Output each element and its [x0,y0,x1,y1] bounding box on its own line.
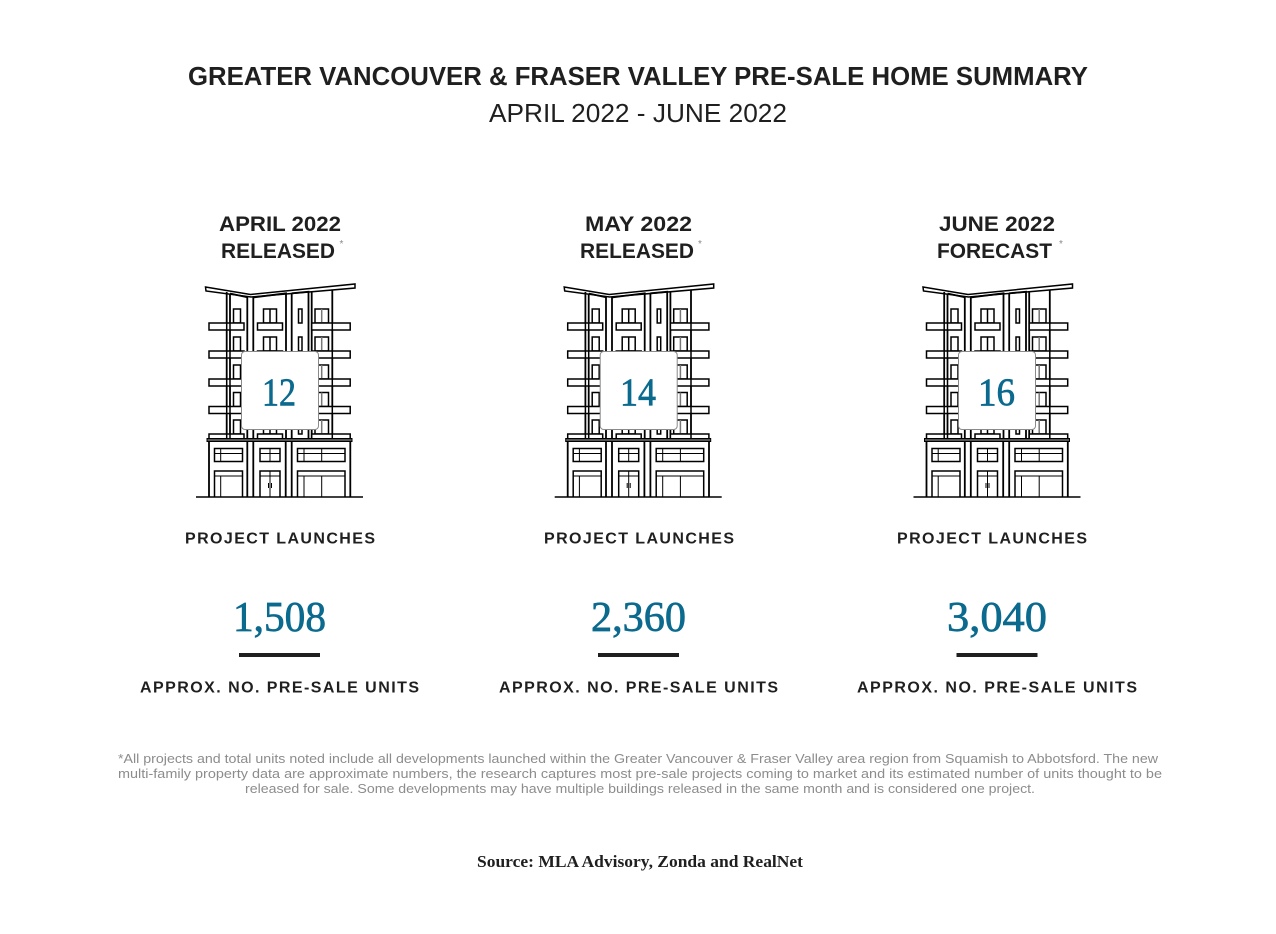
heading: May 2022 released: MAY 2022 [585,213,692,236]
number: 2,360 units: 2,360 [591,595,686,641]
label: approx. no. pre-sale units: APPROX. NO. PRE-SALE UNITS [857,680,1137,696]
title: GREATER VANCOUVER & FRASER VALLEY PRE-SALE HOME SUMMARY [188,63,1088,91]
heading: April 2022 released [219,213,344,263]
divider bar [239,653,320,657]
heading: May 2022 released: RELEASED [580,240,694,263]
icon: apartment building [196,284,363,497]
card: 16 project launches [958,352,1036,430]
divider bar [956,653,1038,657]
subtitle: APRIL 2022 - JUNE 2022 [489,100,787,128]
heading: June 2022 forecast: * [1059,239,1063,250]
divider bar [598,653,679,657]
heading: May 2022 released: * [698,239,702,250]
heading: June 2022 forecast [937,213,1063,263]
heading: April 2022 released: RELEASED [221,240,335,263]
footnote: multi-family property data are approximate numbers, the research captures most pre-sale projects coming to market and its estimated number of units thought to be [118,766,1162,781]
card: 14 project launches: 14 [620,371,656,414]
heading: June 2022 forecast: FORECAST [937,240,1052,263]
panel: May 2022 [499,213,778,696]
number: 3,040 units: 3,040 [947,595,1047,641]
heading: April 2022 released: APRIL 2022 [219,213,341,236]
footnote: *All projects and total units noted include all developments launched within the Greater Vancouver & Fraser Valley area region from Squamish to Abbotsford. The new [118,751,1159,766]
icon: apartment building [914,284,1080,497]
card: 12 project launches: 12 [262,371,296,414]
heading: May 2022 released [580,213,702,263]
heading: June 2022 forecast: JUNE 2022 [939,213,1055,236]
label: approx. no. pre-sale units: APPROX. NO. PRE-SALE UNITS [140,680,419,696]
label: project launches: PROJECT LAUNCHES [897,530,1087,548]
panel: April 2022 [140,213,419,696]
card: 16 project launches: 16 [978,371,1015,414]
label: approx. no. pre-sale units: APPROX. NO. PRE-SALE UNITS [499,680,778,696]
card: 14 project launches [600,352,677,430]
card: 12 project launches [242,352,318,430]
label: project launches: PROJECT LAUNCHES [185,530,375,548]
label: project launches: PROJECT LAUNCHES [544,530,734,548]
footnote: released for sale. Some developments may have multiple buildings released in the same month and is considered one project. [245,781,1035,796]
icon: apartment building [555,284,722,497]
footnote [118,751,1162,796]
heading: April 2022 released: * [340,239,344,250]
panel: June 2022 [857,213,1137,696]
source line: Source: MLA Advisory, Zonda and RealNet [477,852,803,871]
number: 1,508 units: 1,508 [233,595,326,641]
